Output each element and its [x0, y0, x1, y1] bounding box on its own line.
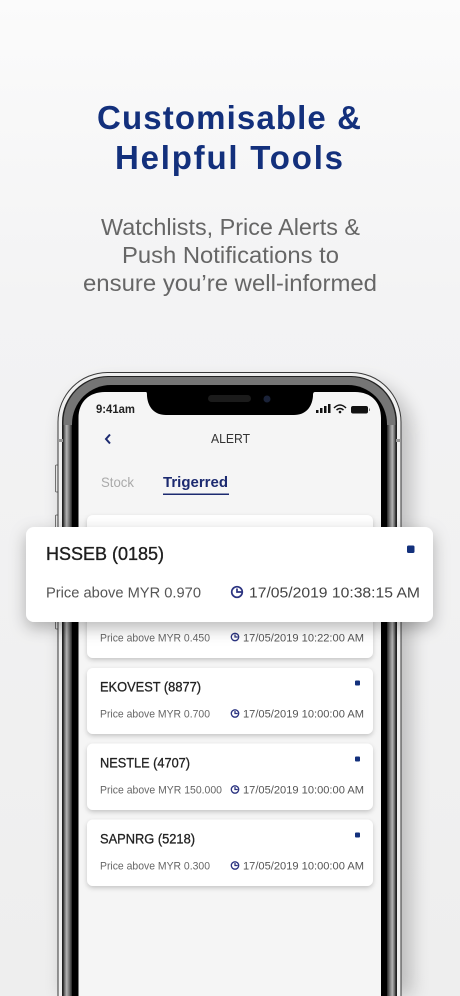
status time: 9:41am — [96, 404, 135, 416]
back arrow — [106, 434, 110, 444]
card: SAPNRG: SAPNRG (5218) — [100, 832, 195, 846]
callout card: HSSEB — [26, 527, 433, 622]
screen — [78, 392, 381, 996]
status icons — [316, 404, 370, 414]
clock icon — [231, 862, 239, 869]
tab: trigerred: Trigerred — [163, 475, 228, 491]
callout card: HSSEB: HSSEB (0185) — [46, 544, 164, 564]
card: SAPNRG: Price above MYR 0.300 — [100, 860, 210, 872]
card: obscured alert: Price above MYR 0.450 — [100, 632, 210, 644]
card: NESTLE: 17/05/2019 10:00:00 AM — [243, 784, 364, 796]
clock icon — [231, 786, 239, 793]
card: NESTLE: NESTLE (4707) — [100, 756, 190, 770]
card: SAPNRG: 17/05/2019 10:00:00 AM — [243, 860, 364, 872]
callout card: HSSEB: 17/05/2019 10:38:15 AM — [249, 586, 420, 602]
card: obscured alert — [87, 515, 373, 658]
side buttons — [55, 464, 58, 630]
clock icon — [231, 633, 239, 641]
clock icon — [231, 710, 239, 717]
clock icon — [232, 587, 242, 597]
phone frame — [58, 372, 402, 996]
title: Helpful Tools — [115, 139, 343, 176]
card: EKOVEST: EKOVEST (8877) — [100, 680, 201, 694]
notch speaker and camera — [208, 395, 270, 402]
phone — [56, 372, 412, 996]
card: EKOVEST: 17/05/2019 10:00:00 AM — [243, 708, 364, 720]
subtitle: Push Notifications to — [122, 242, 339, 268]
title — [97, 99, 361, 176]
subtitle: Watchlists, Price Alerts & — [101, 214, 360, 240]
screen heading: ALERT — [211, 431, 250, 446]
subtitle — [83, 214, 377, 296]
card: NESTLE: Price above MYR 150.000 — [100, 784, 222, 796]
card: SAPNRG — [87, 820, 373, 886]
tab: stock: Stock — [101, 474, 135, 490]
title: Customisable & — [97, 99, 361, 136]
card: obscured alert: 17/05/2019 10:22:00 AM — [243, 632, 364, 644]
card: EKOVEST — [87, 668, 373, 734]
callout card: HSSEB: Price above MYR 0.970 — [46, 586, 201, 602]
card: NESTLE — [87, 744, 373, 810]
phone shadow — [62, 382, 412, 996]
subtitle: ensure you’re well-informed — [83, 270, 377, 296]
card: EKOVEST: Price above MYR 0.700 — [100, 708, 210, 720]
